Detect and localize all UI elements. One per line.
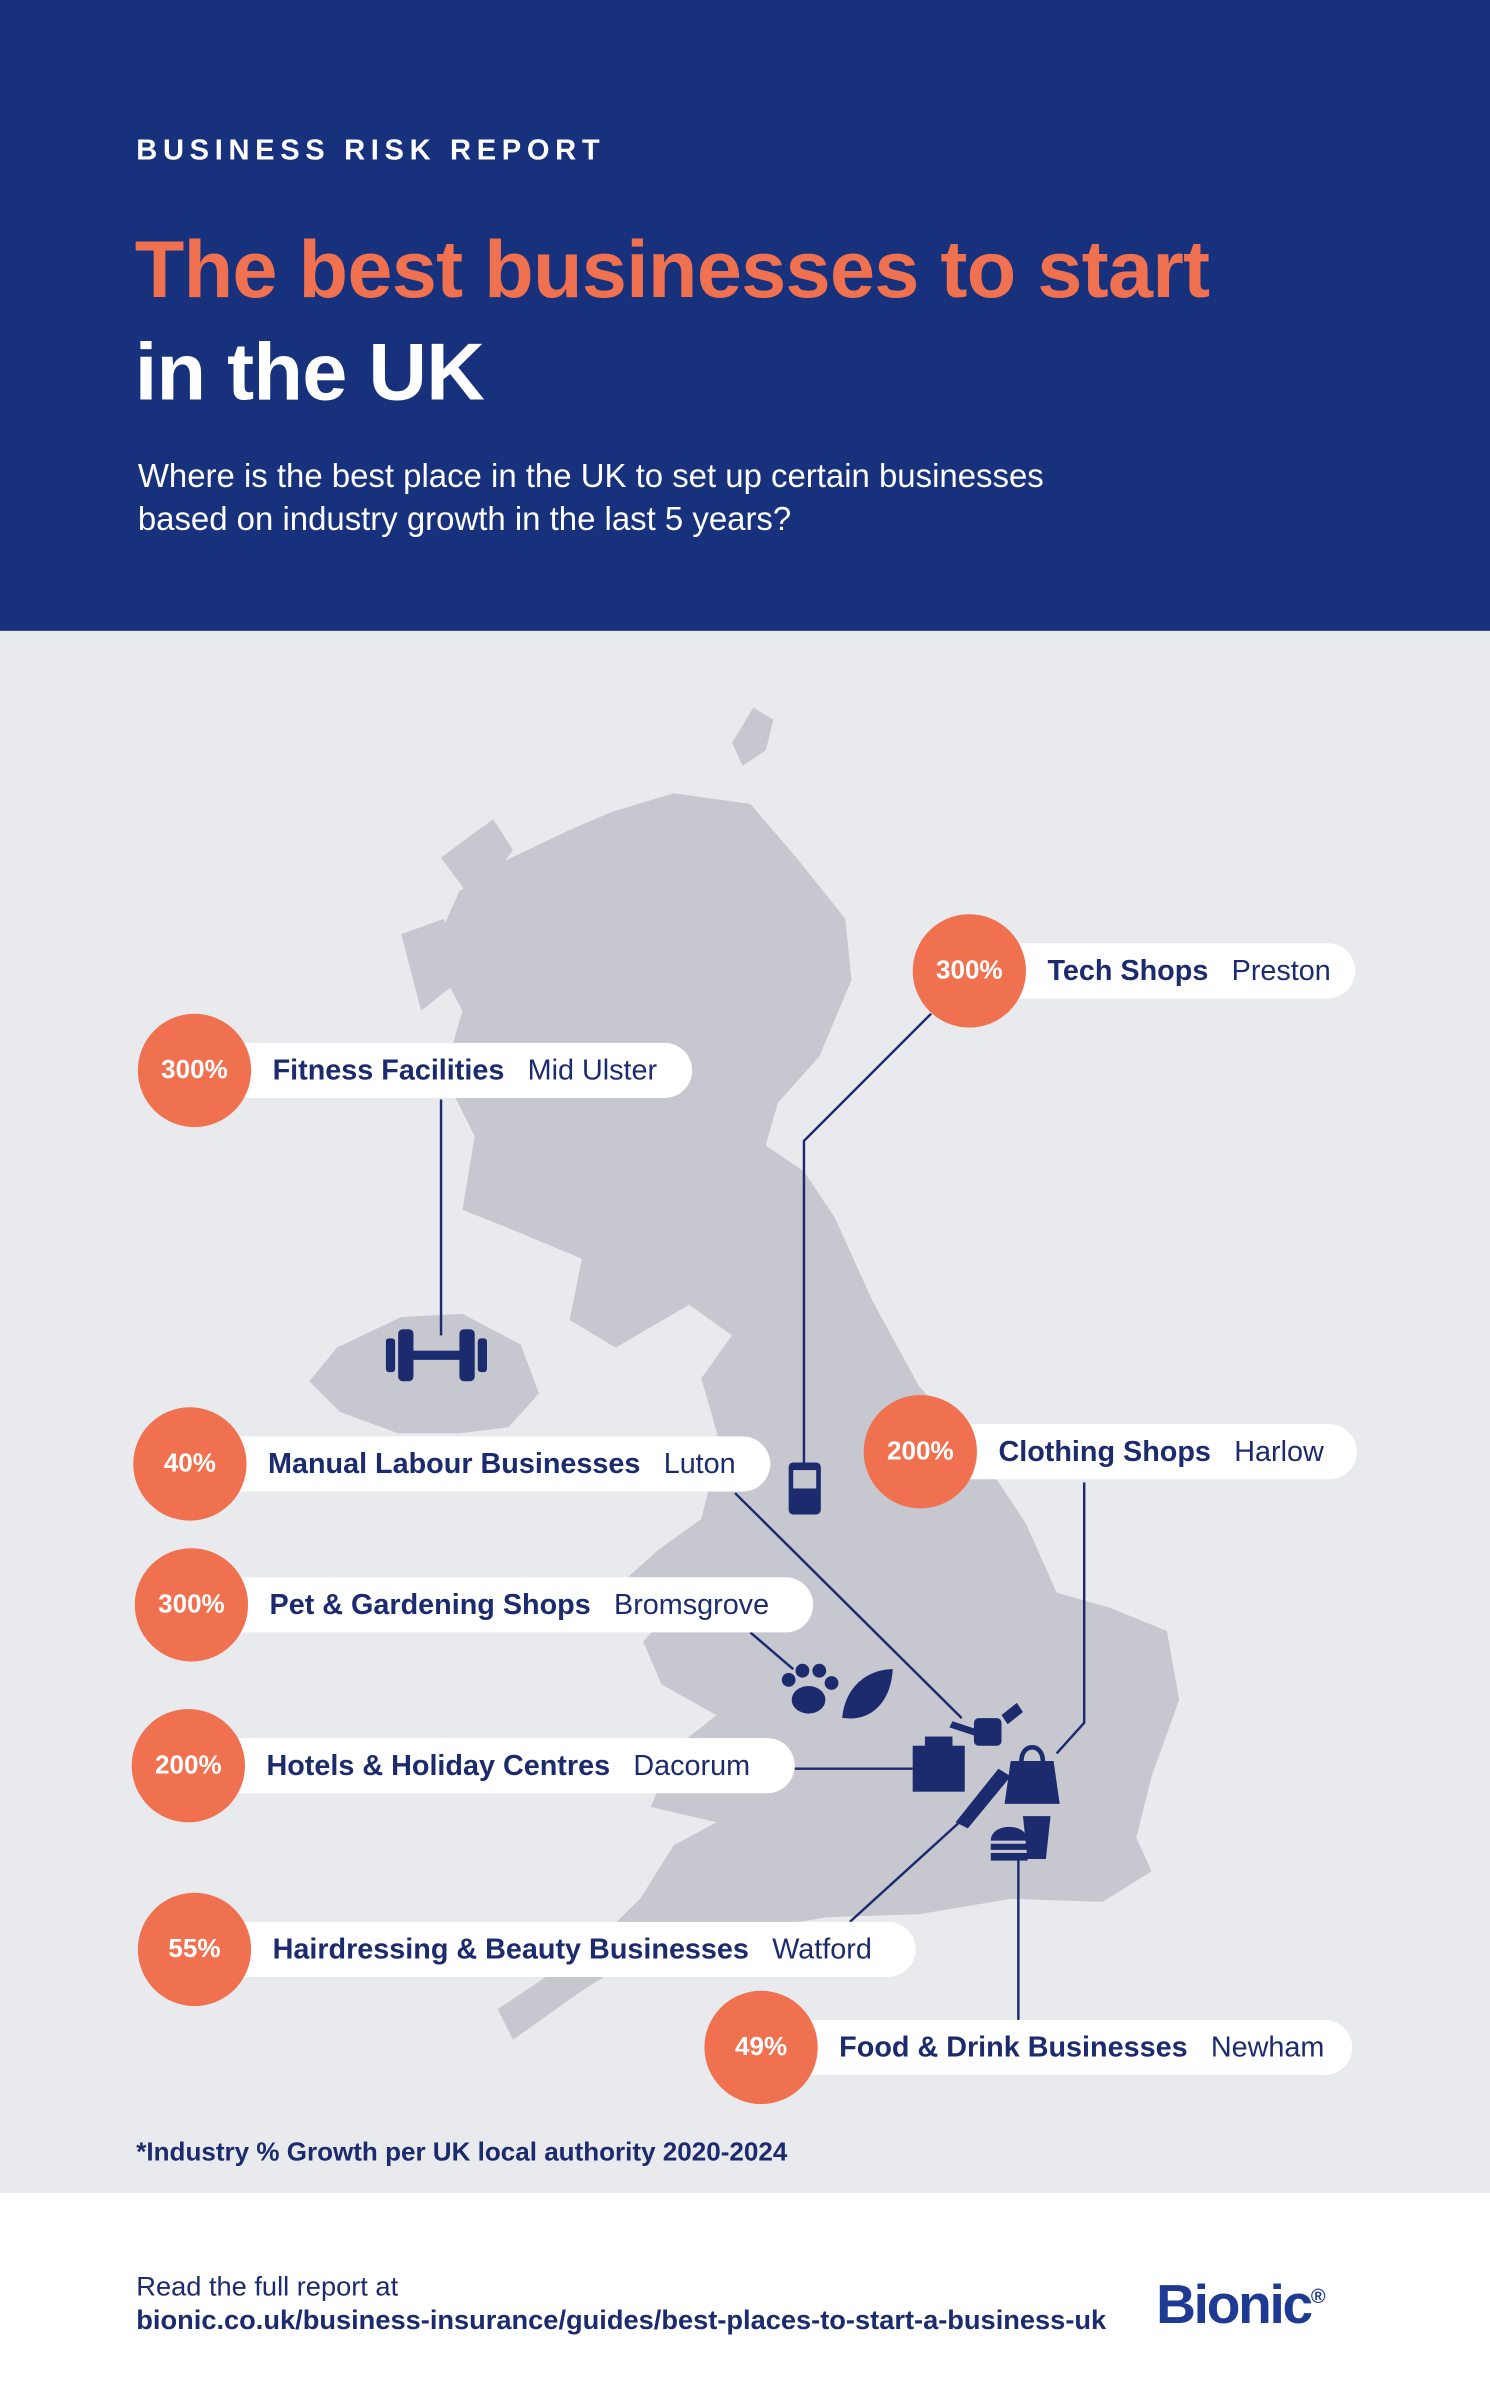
callout: food & drink [704, 1990, 1352, 2104]
text: Hairdressing & Beauty Businesses Watford [273, 1933, 872, 1965]
text: Tech Shops Preston [1047, 954, 1331, 986]
text: 200% [887, 1436, 954, 1466]
icon: comb [956, 1769, 1011, 1828]
subtitle: based on industry growth in the last 5 years? [138, 501, 791, 538]
text: 300% [158, 1590, 225, 1619]
text: Hotels & Holiday Centres Dacorum [266, 1749, 750, 1781]
icon: paw [782, 1664, 838, 1714]
callout: pet & gardening [134, 1548, 814, 1662]
title line 1: The best businesses to start [135, 225, 1209, 315]
icon: phone [789, 1462, 821, 1515]
text: Pet & Gardening Shops Bromsgrove [270, 1588, 769, 1620]
text: Food & Drink Businesses Newham [839, 2031, 1324, 2063]
callout: clothing [864, 1395, 1357, 1508]
header panel [0, 0, 1490, 631]
subtitle: Where is the best place in the UK to set up certain businesses [138, 458, 1044, 495]
text: 40% [164, 1449, 216, 1478]
text: Manual Labour Businesses Luton [268, 1447, 736, 1479]
callout: hotels [132, 1709, 795, 1822]
callout: hairdressing [138, 1892, 916, 2006]
logo: Bionic® [1156, 2273, 1323, 2335]
icon: burger and drink [991, 1816, 1051, 1861]
subtitle [138, 458, 1044, 538]
footnote: *Industry % Growth per UK local authority 2020-2024 [136, 2138, 787, 2167]
text: 300% [936, 956, 1003, 985]
callout: fitness [138, 1014, 692, 1128]
callout: manual labour [133, 1407, 770, 1521]
text: 200% [155, 1750, 222, 1779]
footer link text [136, 2271, 1106, 2335]
text: 300% [161, 1055, 228, 1084]
footer link text: Read the full report at [136, 2271, 398, 2302]
icon: bag [1005, 1747, 1060, 1804]
icon: leaf [842, 1669, 893, 1718]
icon: dumbbell [386, 1329, 487, 1381]
map panel background [0, 631, 1490, 2193]
text: 49% [735, 2032, 787, 2061]
callout: tech shops [912, 914, 1356, 1028]
footer link text: bionic.co.uk/business-insurance/guides/best-places-to-start-a-business-uk [136, 2305, 1106, 2335]
title line 2: in the UK [135, 328, 484, 418]
text: 55% [168, 1934, 221, 1963]
kicker: BUSINESS RISK REPORT [136, 135, 605, 167]
text: Clothing Shops Harlow [998, 1435, 1324, 1467]
icon: building [913, 1737, 965, 1792]
icon: tools [949, 1703, 1023, 1746]
text: Fitness Facilities Mid Ulster [273, 1054, 657, 1086]
